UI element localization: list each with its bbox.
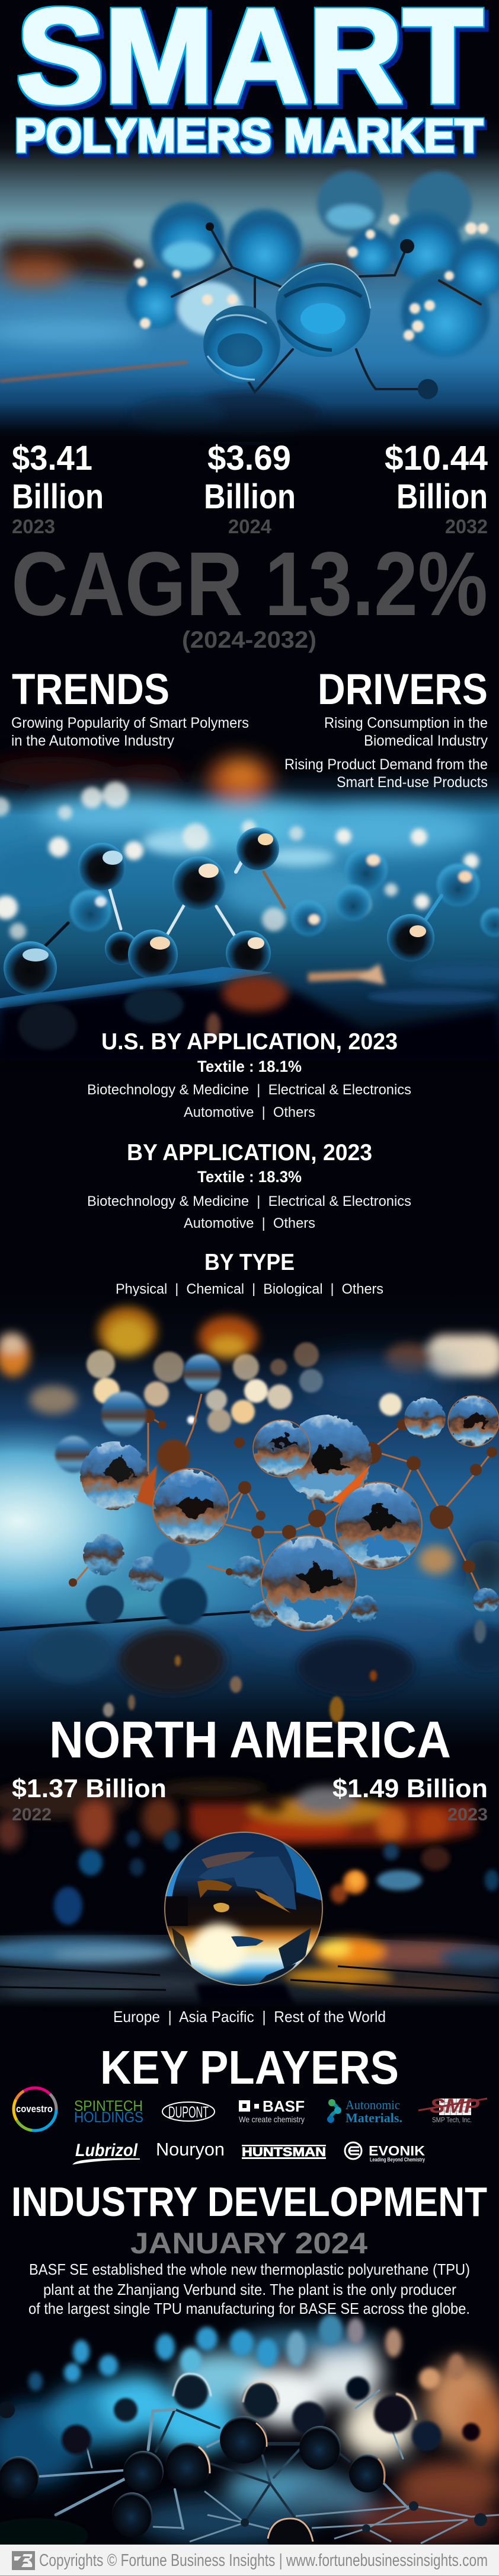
panel: hero image 3 with mirrored molecules — [0, 1296, 499, 1747]
stat: 2023 market size: Billion — [12, 477, 104, 516]
logo: DuPont: DUPONT — [168, 2103, 209, 2121]
panel: hero image 5 with dark network — [0, 2314, 499, 2558]
panel: hero image 1 with glass molecules — [0, 119, 499, 442]
logo: BASF: We create chemistry — [239, 2115, 305, 2124]
drivers text — [284, 715, 488, 791]
panel: by type: Physical | Chemical | Biological | Others — [116, 1281, 383, 1297]
footer bar — [0, 2545, 499, 2576]
trends text — [11, 715, 249, 749]
development description — [28, 2260, 470, 2317]
stat: 2024 market size: 2024 — [228, 515, 272, 537]
stat: 2024 market size: Billion — [204, 477, 296, 516]
panel: U.S. by application — [87, 1029, 411, 1120]
stat: 2023 market size: 2023 — [12, 515, 55, 537]
logo: Spintech Holdings: SPINTECH — [74, 2098, 143, 2115]
stat: North America 2023: $1.49 Billion — [332, 1774, 488, 1803]
panel: by type: BY TYPE — [204, 1250, 295, 1275]
icon: crystal globe — [164, 1832, 323, 1987]
logo: Nouryon: Nouryon — [156, 2139, 225, 2160]
logo: BASF: BASF — [263, 2097, 305, 2115]
logo: Spintech Holdings: HOLDINGS — [74, 2109, 143, 2126]
stat: North America 2022: $1.37 Billion — [12, 1774, 167, 1803]
stat: North America 2022: 2022 — [12, 1805, 52, 1824]
logo: BASF — [239, 2097, 305, 2124]
heading: North America: NORTH AMERICA — [49, 1711, 451, 1769]
stat: 2023 market size — [12, 439, 104, 537]
logo: Evonik — [345, 2142, 425, 2163]
panel: by application: Biotechnology & Medicine | Electrical & Electronics — [87, 1193, 411, 1209]
heading: trends: TRENDS — [12, 666, 169, 714]
logo: Covestro — [14, 2088, 56, 2131]
stat: North America 2022 — [12, 1774, 167, 1824]
drivers text: Smart End-use Products — [337, 774, 488, 791]
stat: 2024 market size: $3.69 — [207, 439, 291, 477]
panel: by application — [87, 1140, 411, 1231]
logo: SMP Tech: SMP Tech, Inc. — [432, 2116, 472, 2124]
CAGR period: (2024-2032) — [182, 627, 316, 653]
logo: DuPont — [162, 2102, 215, 2121]
stat: 2023 market size: $3.41 — [12, 439, 92, 477]
drivers text: Rising Product Demand from the — [284, 756, 488, 773]
panel: by application: Automotive | Others — [184, 1215, 315, 1231]
panel: hero image 2 with chrome molecules — [0, 756, 499, 1062]
logo: SMP Tech: SMP — [430, 2095, 479, 2118]
logo: Spintech Holdings — [74, 2098, 143, 2126]
stat: North America 2023 — [332, 1774, 488, 1824]
panel: by application: Textile : 18.3% — [197, 1168, 302, 1186]
panel: U.S. by application: U.S. BY APPLICATION, 2023 — [101, 1029, 398, 1055]
logo: Autonomic Materials: Materials. — [346, 2110, 402, 2125]
stat: 2032 market size: $10.44 — [385, 439, 488, 477]
logo: Evonik: Leading Beyond Chemistry — [370, 2157, 425, 2163]
logo: Huntsman: HUNTSMAN — [242, 2145, 326, 2159]
stat: 2032 market size: 2032 — [445, 515, 488, 537]
logo: Autonomic Materials — [327, 2097, 402, 2125]
stat: 2032 market size — [385, 439, 488, 537]
development description: of the largest single TPU manufacturing for BASE SE across the globe. — [28, 2300, 470, 2317]
panel: U.S. by application: Automotive | Others — [184, 1104, 315, 1120]
logo: Lubrizol: Lubrizol — [75, 2141, 138, 2160]
development description: plant at the Zhanjiang Verbund site. The plant is the only producer — [43, 2281, 456, 2298]
title: POLYMERS MARKET: POLYMERS MARKET — [15, 109, 483, 162]
panel: U.S. by application: Biotechnology & Medicine | Electrical & Electronics — [87, 1082, 411, 1098]
drivers text: Rising Consumption in the — [324, 715, 488, 731]
panel: U.S. by application: Textile : 18.1% — [197, 1058, 302, 1075]
logo: Autonomic Materials: Autonomic — [346, 2097, 400, 2112]
logo: Covestro: covestro — [16, 2103, 53, 2115]
panel: hero image 4 with crystal globe — [0, 1781, 499, 2007]
heading: key players: KEY PLAYERS — [100, 2041, 399, 2094]
drivers text: Biomedical Industry — [364, 733, 488, 749]
icon: Fortune Business Insights logo — [12, 2551, 35, 2570]
stat: 2032 market size: Billion — [396, 477, 488, 516]
trends text: in the Automotive Industry — [11, 733, 174, 749]
panel: by application: BY APPLICATION, 2023 — [127, 1140, 372, 1166]
stat: North America 2023: 2023 — [447, 1805, 488, 1824]
development date: JANUARY 2024 — [130, 2227, 367, 2260]
logo: SMP Tech — [418, 2095, 487, 2124]
other regions: Europe | Asia Pacific | Rest of the World — [113, 2008, 386, 2026]
panel: by type — [116, 1250, 383, 1297]
trends text: Growing Popularity of Smart Polymers — [11, 715, 249, 731]
stat: 2024 market size — [204, 439, 296, 537]
logo: Evonik: EVONIK — [369, 2143, 425, 2158]
